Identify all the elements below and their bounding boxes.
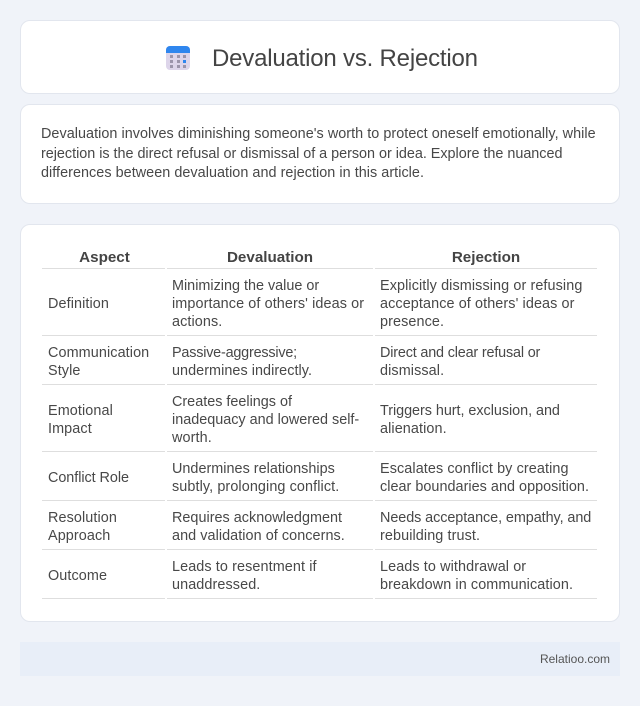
row: Emotional Impact: Creates feelings of [172, 394, 292, 410]
row: Resolution Approach: rebuilding trust. [380, 528, 480, 544]
comparison table card [20, 224, 620, 622]
row: Resolution Approach: Requires acknowledgment [172, 510, 342, 526]
row: Definition: Minimizing the value or [172, 278, 319, 294]
row: Emotional Impact: Emotional [48, 403, 113, 419]
row: Resolution Approach: and validation of concerns. [172, 528, 345, 544]
row: Definition: acceptance of others' ideas or [380, 296, 575, 312]
row: Conflict Role: Escalates conflict by creating [380, 461, 569, 477]
row: Definition: Explicitly dismissing or refusing [380, 278, 582, 294]
row: Communication Style: undermines indirectly. [172, 363, 312, 379]
header: Devaluation: Devaluation [227, 249, 313, 266]
comparison table [42, 249, 597, 599]
row: Emotional Impact: worth. [172, 430, 212, 446]
row: Conflict Role: clear boundaries and opposition. [380, 479, 589, 495]
row: Conflict Role [48, 461, 589, 495]
row: Outcome: Leads to resentment if [172, 559, 317, 575]
intro text: Devaluation involves diminishing someone's worth to protect oneself emotionally, while [41, 126, 596, 142]
row: Outcome: breakdown in communication. [380, 577, 573, 593]
row: Outcome [48, 559, 573, 593]
row: Conflict Role: Conflict Role [48, 470, 129, 486]
icon: calendar [166, 46, 190, 70]
header: Rejection: Rejection [452, 249, 520, 266]
header: Aspect: Aspect [79, 249, 130, 266]
row: Emotional Impact: alienation. [380, 421, 447, 437]
row: Resolution Approach: Needs acceptance, empathy, and [380, 510, 591, 526]
row: Communication Style: Style [48, 363, 80, 379]
row: Definition: actions. [172, 314, 222, 330]
intro card [20, 104, 620, 204]
row: Communication Style [48, 345, 540, 379]
row: Outcome: Leads to withdrawal or [380, 559, 526, 575]
row: Conflict Role: subtly, prolonging conflict. [172, 479, 339, 495]
row: Emotional Impact [48, 394, 560, 446]
title: Devaluation vs. Rejection [212, 45, 478, 72]
intro text: rejection is the direct refusal or dismissal of a person or idea. Explore the nuanced [41, 146, 562, 162]
row: Definition: Definition [48, 296, 109, 312]
row: Emotional Impact: Impact [48, 421, 92, 437]
intro text: differences between devaluation and rejection in this article. [41, 165, 424, 181]
row: Communication Style: Passive-aggressive; [172, 345, 297, 361]
row: Outcome: Outcome [48, 568, 107, 584]
row: Definition [48, 278, 582, 330]
row: Outcome: unaddressed. [172, 577, 260, 593]
row: Conflict Role: Undermines relationships [172, 461, 335, 477]
title card [20, 20, 620, 94]
row: Resolution Approach: Resolution [48, 510, 117, 526]
row: Communication Style: dismissal. [380, 363, 444, 379]
row: Communication Style: Communication [48, 345, 149, 361]
row: Definition: presence. [380, 314, 444, 330]
footer credit: Relatioo.com [540, 652, 610, 666]
row: Resolution Approach [48, 510, 591, 544]
row: Emotional Impact: inadequacy and lowered self- [172, 412, 359, 428]
footer bar [20, 642, 620, 676]
row: Resolution Approach: Approach [48, 528, 110, 544]
row: Definition: importance of others' ideas or [172, 296, 364, 312]
row: Communication Style: Direct and clear refusal or [380, 345, 540, 361]
intro text [41, 126, 596, 181]
row: Emotional Impact: Triggers hurt, exclusion, and [380, 403, 560, 419]
